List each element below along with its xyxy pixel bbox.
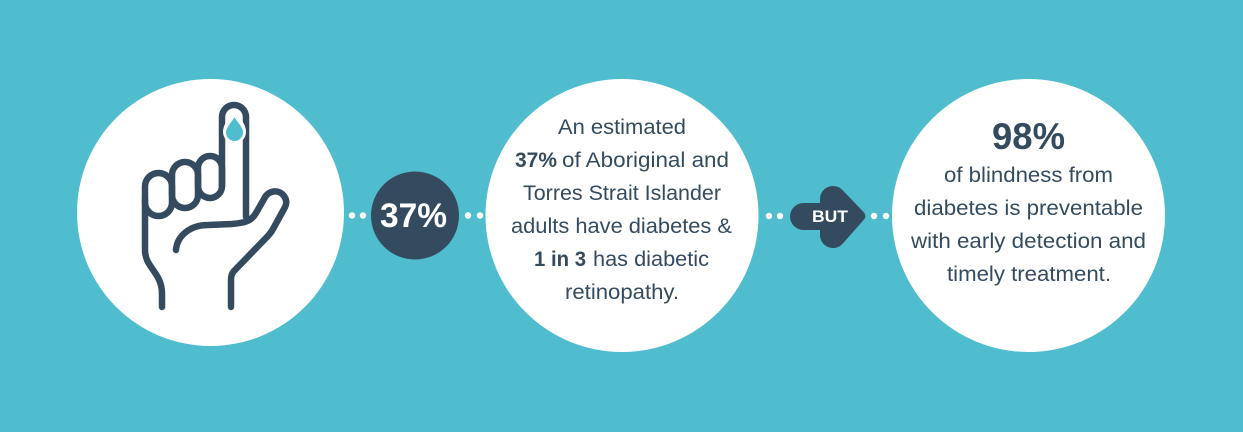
connector dots: statistic to text — [465, 212, 483, 219]
statistic badge: 37% — [371, 172, 459, 260]
text block: prevalence of diabetes and retinopathy: has diabetic — [593, 247, 709, 271]
text block: prevalence of diabetes and retinopathy: 37% — [515, 148, 557, 172]
arrow: BUT: BUT — [812, 207, 849, 226]
text block: preventable blindness: with early detection and — [910, 229, 1146, 253]
connector dots: text to arrow — [766, 213, 783, 219]
text block: preventable blindness: diabetes is preventable — [914, 196, 1143, 220]
text block: prevalence of diabetes and retinopathy: Torres Strait Islander — [523, 181, 721, 205]
heading: 98%: 98% — [992, 116, 1065, 157]
text block: prevalence of diabetes and retinopathy: adults have diabetes & — [511, 214, 732, 238]
text block: prevalence of diabetes and retinopathy: 1 in 3 — [534, 247, 586, 271]
icon: blood drop — [223, 110, 246, 144]
panel: prevalence text circle — [486, 79, 758, 352]
text block: preventable blindness: timely treatment. — [947, 262, 1111, 286]
text block: prevalence of diabetes and retinopathy: of Aboriginal and — [562, 148, 729, 172]
icon: hand with blood drop on fingertip — [145, 105, 286, 307]
text block: preventable blindness: of blindness from — [944, 163, 1113, 187]
text block: preventable blindness — [910, 163, 1146, 286]
panel: hand icon circle — [77, 79, 344, 346]
text block: prevalence of diabetes and retinopathy: An estimated — [558, 115, 686, 139]
statistic badge: 37%: 37% — [380, 197, 447, 235]
panel: prevention text circle — [892, 79, 1165, 352]
connector dots: arrow to final circle — [871, 213, 889, 219]
text block: prevalence of diabetes and retinopathy: retinopathy. — [565, 280, 679, 304]
text block: prevalence of diabetes and retinopathy — [511, 115, 732, 304]
arrow: BUT — [790, 186, 865, 248]
connector dots: hand to statistic — [349, 212, 366, 219]
